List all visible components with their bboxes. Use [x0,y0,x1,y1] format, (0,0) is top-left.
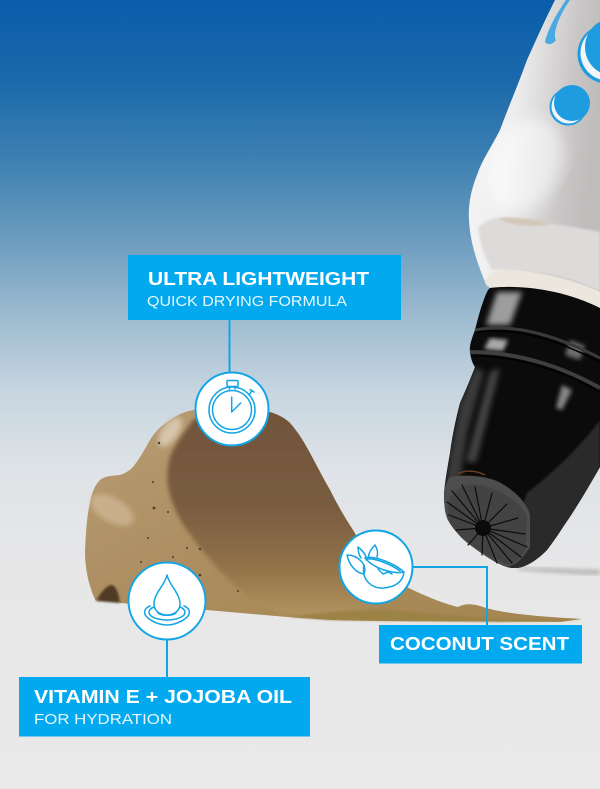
foam pores [140,442,239,592]
connector: coconut [412,567,487,626]
callout: coconut scent [379,625,582,664]
bottle tan tinge [498,217,552,226]
connector: vitamin [166,638,168,678]
bottle floor shadow [515,567,600,575]
bottle body lower band [478,218,600,292]
nozzle rust spot [458,471,485,475]
icon: water drop [128,562,206,640]
icon: stopwatch [196,372,268,446]
foam highlight top [154,413,186,451]
bottle body sheen [488,118,568,212]
callout: coconut scent: COCONUT SCENT [390,633,570,654]
nozzle shading [444,292,600,580]
foam shaded hollow [165,412,356,594]
callout: vitamin e + jojoba oil [19,677,310,736]
foam highlight left [85,488,139,532]
callout: vitamin e + jojoba oil: FOR HYDRATION [34,711,172,728]
bottle black nozzle [444,287,600,568]
bottle [444,0,600,580]
callout: ultra lightweight: QUICK DRYING FORMULA [147,293,347,310]
bottle blue dot large [578,18,600,84]
foam interior shading [165,412,356,594]
bottle blue dot [550,85,590,126]
bottle blue streak [545,0,570,44]
bottle cream collar [485,270,600,308]
callout: vitamin e + jojoba oil: VITAMIN E + JOJOBA OIL [34,686,292,707]
connector: ultra lightweight [228,320,230,380]
foam swatch [85,400,582,622]
foam left undercut shadow [96,585,120,603]
nozzle face disc [447,484,527,565]
bottle white body [469,0,600,312]
nozzle ridges [470,328,600,392]
nozzle end face [444,476,530,567]
foam tail [290,610,582,622]
callout: ultra lightweight [128,255,401,320]
nozzle sun slits [447,485,527,563]
icon: coconut [340,530,412,604]
callout: ultra lightweight: ULTRA LIGHTWEIGHT [148,268,370,289]
